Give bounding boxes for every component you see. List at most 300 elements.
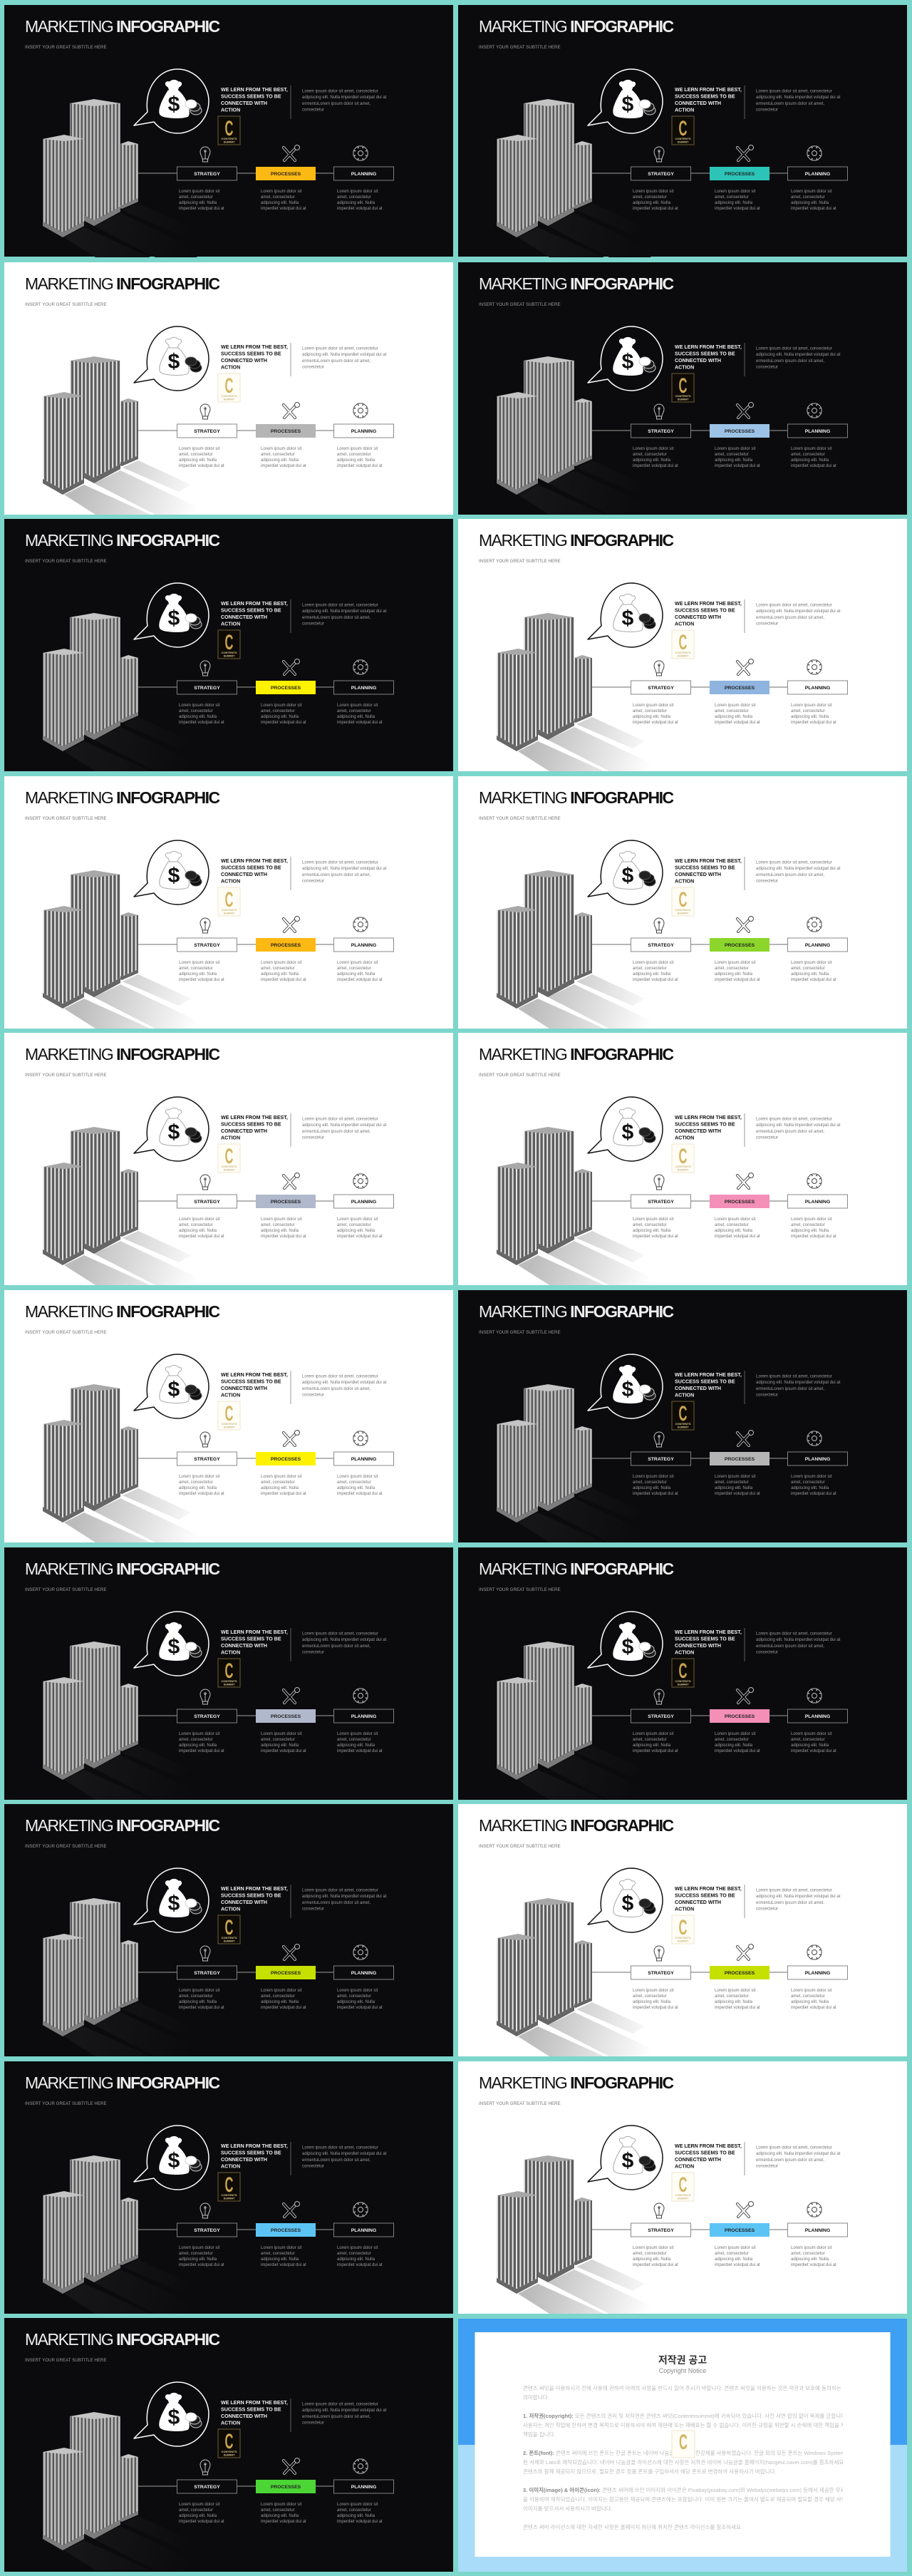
text: planning: amet, consectetur <box>791 1223 825 1227</box>
description: ermentuLorem ipsum dolor sit amet, <box>302 873 370 877</box>
copyright logo <box>672 2431 695 2458</box>
heading: ACTION <box>221 1393 240 1398</box>
text: planning: Lorem ipsum dolor sit <box>791 1475 832 1479</box>
logo: C <box>225 888 233 912</box>
text: processes: imperdiet volutpat dui at <box>715 721 760 725</box>
heading: CONNECTED WITH <box>675 872 721 877</box>
box: processes <box>256 1966 316 1979</box>
box: processes: PROCESSES <box>725 1457 755 1462</box>
logo: CONTENTS <box>221 1165 237 1168</box>
copyright card <box>475 2332 891 2557</box>
text: strategy: imperdiet volutpat dui at <box>179 1235 224 1239</box>
box: processes: PROCESSES <box>725 1714 755 1719</box>
text: planning: adipiscing elit. Nulla <box>337 1743 375 1748</box>
box: planning <box>788 1195 848 1208</box>
logo: C <box>679 888 687 912</box>
text: strategy: imperdiet volutpat dui at <box>633 2263 678 2267</box>
description: ermentuLorem ipsum dolor sit amet, <box>302 1387 370 1391</box>
logo: CONTENTS <box>675 137 691 140</box>
text: processes: adipiscing elit. Nulla <box>715 458 753 463</box>
text: processes: adipiscing elit. Nulla <box>261 201 299 205</box>
text: planning: amet, consectetur <box>791 2252 825 2256</box>
text: strategy: Lorem ipsum dolor sit <box>179 1732 220 1736</box>
buildings <box>43 870 200 1029</box>
heading: ACTION <box>221 1906 240 1912</box>
box: planning <box>333 2480 393 2493</box>
logo: CONTENTS <box>221 137 237 140</box>
text: strategy: Lorem ipsum dolor sit <box>179 1217 220 1222</box>
icon: gear <box>807 146 822 160</box>
text: strategy: amet, consectetur <box>633 1738 667 1742</box>
heading: ACTION <box>221 2164 240 2170</box>
text: processes: amet, consectetur <box>715 967 749 971</box>
heading: WE LERN FROM THE BEST, <box>675 601 742 607</box>
description: Lorem ipsum dolor sit amet, consectetur <box>756 1632 832 1637</box>
text: processes: imperdiet volutpat dui at <box>261 978 306 982</box>
description: Lorem ipsum dolor sit amet, consectetur <box>756 1118 832 1122</box>
icon: light bulb <box>200 147 210 162</box>
text: planning: Lorem ipsum dolor sit <box>791 1217 832 1222</box>
text: strategy: Lorem ipsum dolor sit <box>633 704 674 708</box>
logo: SUMMIT <box>678 1939 689 1943</box>
box: processes: PROCESSES <box>271 686 301 691</box>
icon: light bulb <box>654 661 664 676</box>
subtitle: INSERT YOUR GREAT SUBTITLE HERE <box>479 1844 561 1849</box>
text: strategy: Lorem ipsum dolor sit <box>179 2503 220 2507</box>
text: processes: Lorem ipsum dolor sit <box>261 961 302 965</box>
heading: SUCCESS SEEMS TO BE <box>221 351 281 356</box>
panel: copyright notice <box>458 2319 907 2572</box>
description: ermentuLorem ipsum dolor sit amet, <box>302 1130 370 1134</box>
text: planning: imperdiet volutpat dui at <box>337 2520 383 2524</box>
text: strategy: amet, consectetur <box>179 2252 213 2256</box>
speech bubble money icon <box>134 1097 209 1161</box>
icon: tools <box>737 1688 754 1703</box>
subtitle: INSERT YOUR GREAT SUBTITLE HERE <box>479 2101 561 2106</box>
heading: WE LERN FROM THE BEST, <box>675 1115 742 1120</box>
logo: SUMMIT <box>678 398 689 401</box>
heading: WE LERN FROM THE BEST, <box>675 1886 742 1892</box>
text: processes: imperdiet volutpat dui at <box>261 464 306 468</box>
description: Lorem ipsum dolor sit amet, consectetur <box>756 1889 832 1893</box>
connector line <box>138 430 333 431</box>
heading: CONNECTED WITH <box>675 1900 721 1905</box>
box: processes: PROCESSES <box>271 172 301 177</box>
box: planning <box>333 1966 393 1979</box>
logo: SUMMIT <box>678 911 689 915</box>
logo: C <box>225 117 233 140</box>
text: processes: adipiscing elit. Nulla <box>261 972 299 977</box>
logo: SUMMIT <box>224 1939 235 1943</box>
description: adipiscing elit. Nulla imperdiet volutpat dui at <box>302 1123 387 1128</box>
text: processes: adipiscing elit. Nulla <box>715 1486 753 1490</box>
text: processes: adipiscing elit. Nulla <box>715 2000 753 2004</box>
heading: SUCCESS SEEMS TO BE <box>221 607 281 613</box>
text: planning: amet, consectetur <box>791 967 825 971</box>
logo: SUMMIT <box>678 2197 689 2200</box>
panel: dark slide, orange processes <box>4 5 453 257</box>
text: strategy: amet, consectetur <box>179 1994 213 1999</box>
logo: C <box>225 2173 233 2197</box>
text: processes: amet, consectetur <box>715 1480 749 1485</box>
heading: CONNECTED WITH <box>675 1386 721 1391</box>
logo <box>218 2429 240 2458</box>
text: processes: amet, consectetur <box>261 967 295 971</box>
connector line <box>138 2485 333 2487</box>
subtitle: INSERT YOUR GREAT SUBTITLE HERE <box>479 1073 561 1078</box>
logo: SUMMIT <box>224 398 235 401</box>
description: consectetur <box>302 1651 324 1655</box>
heading: ACTION <box>221 1135 240 1140</box>
speech bubble money icon: $ <box>622 93 634 116</box>
box: planning <box>788 681 848 694</box>
text: planning: Lorem ipsum dolor sit <box>337 447 378 451</box>
icon: gear <box>807 917 822 932</box>
description: adipiscing elit. Nulla imperdiet volutpat dui at <box>302 867 387 871</box>
box: processes <box>256 424 316 438</box>
text: processes: amet, consectetur <box>715 195 749 200</box>
text: processes: adipiscing elit. Nulla <box>261 2257 299 2262</box>
box: planning: PLANNING <box>351 686 376 691</box>
box: processes: PROCESSES <box>725 1200 755 1205</box>
text: strategy: amet, consectetur <box>179 453 213 457</box>
heading: SUCCESS SEEMS TO BE <box>221 94 281 100</box>
copyright body text: 의미합니다. <box>523 2394 549 2401</box>
speech bubble money icon: $ <box>622 1635 634 1659</box>
description: ermentuLorem ipsum dolor sit amet, <box>756 616 824 620</box>
icon: light bulb <box>200 1175 210 1190</box>
text: strategy: amet, consectetur <box>179 1480 213 1485</box>
text: planning: Lorem ipsum dolor sit <box>791 1989 832 1993</box>
box: planning: PLANNING <box>351 1714 376 1719</box>
description: consectetur <box>756 1651 778 1655</box>
box: strategy <box>631 1966 691 1979</box>
box: processes: PROCESSES <box>725 2228 755 2233</box>
text: strategy: imperdiet volutpat dui at <box>179 1492 224 1496</box>
box: planning <box>333 1709 393 1723</box>
description: ermentuLorem ipsum dolor sit amet, <box>756 359 824 364</box>
text: strategy: adipiscing elit. Nulla <box>179 2000 217 2004</box>
description: Lorem ipsum dolor sit amet, consectetur <box>302 346 378 351</box>
speech bubble money icon: $ <box>168 1892 180 1915</box>
title: MARKETING INFOGRAPHIC <box>479 274 674 293</box>
text: processes: amet, consectetur <box>261 453 295 457</box>
connector line <box>138 172 333 174</box>
heading: SUCCESS SEEMS TO BE <box>221 1893 281 1899</box>
heading: SUCCESS SEEMS TO BE <box>675 351 735 356</box>
box: strategy: STRATEGY <box>194 1971 220 1976</box>
logo: C <box>679 2173 687 2197</box>
speech bubble money icon <box>134 583 209 647</box>
icon: tools <box>284 402 299 418</box>
text: processes: imperdiet volutpat dui at <box>715 464 760 468</box>
heading: CONNECTED WITH <box>675 101 721 106</box>
heading: ACTION <box>675 1393 694 1398</box>
box: strategy: STRATEGY <box>194 1200 220 1205</box>
text: strategy: adipiscing elit. Nulla <box>179 2514 217 2518</box>
speech bubble money icon <box>134 326 209 391</box>
text: strategy: imperdiet volutpat dui at <box>633 2006 678 2010</box>
speech bubble money icon <box>588 1097 663 1161</box>
icon: light bulb <box>200 918 210 933</box>
icon: tools <box>284 145 299 160</box>
heading: CONNECTED WITH <box>675 614 721 620</box>
heading: WE LERN FROM THE BEST, <box>675 2143 742 2149</box>
box: strategy <box>177 1709 237 1723</box>
text: processes: Lorem ipsum dolor sit <box>715 1989 756 1993</box>
panel: dark slide, green processes <box>4 2318 453 2572</box>
text: strategy: amet, consectetur <box>633 709 667 713</box>
icon: gear <box>353 2459 368 2473</box>
icon: tools <box>284 2458 299 2473</box>
box: processes <box>710 1195 770 1208</box>
description: Lorem ipsum dolor sit amet, consectetur <box>302 1118 378 1122</box>
text: processes: Lorem ipsum dolor sit <box>715 2246 756 2250</box>
text: strategy: imperdiet volutpat dui at <box>179 2520 224 2524</box>
box: planning: PLANNING <box>805 943 830 948</box>
heading: ACTION <box>675 878 694 884</box>
text: strategy: adipiscing elit. Nulla <box>633 201 671 205</box>
description: consectetur <box>756 1907 778 1912</box>
text: processes: Lorem ipsum dolor sit <box>261 704 302 708</box>
box: strategy: STRATEGY <box>648 172 674 177</box>
speech bubble money icon <box>588 1612 663 1676</box>
box: processes <box>256 167 316 180</box>
text: planning: imperdiet volutpat dui at <box>791 2006 836 2010</box>
text: planning: imperdiet volutpat dui at <box>791 1749 836 1753</box>
logo: C <box>679 374 687 398</box>
description: Lorem ipsum dolor sit amet, consectetur <box>302 603 378 607</box>
heading: SUCCESS SEEMS TO BE <box>675 2150 735 2155</box>
text: strategy: imperdiet volutpat dui at <box>179 464 224 468</box>
subtitle: INSERT YOUR GREAT SUBTITLE HERE <box>25 1073 107 1078</box>
text: planning: adipiscing elit. Nulla <box>337 2514 375 2518</box>
text: planning: amet, consectetur <box>337 2508 371 2513</box>
title: MARKETING INFOGRAPHIC <box>479 2073 674 2092</box>
speech bubble money icon: $ <box>168 864 180 887</box>
icon: light bulb <box>654 1175 664 1190</box>
title: MARKETING INFOGRAPHIC <box>25 788 220 807</box>
icon: gear <box>807 1431 822 1446</box>
title: MARKETING INFOGRAPHIC <box>25 1560 220 1578</box>
box: strategy: STRATEGY <box>194 429 220 434</box>
logo: C <box>225 631 233 654</box>
heading: WE LERN FROM THE BEST, <box>221 1372 288 1378</box>
text: planning: adipiscing elit. Nulla <box>337 1486 375 1490</box>
text: planning: Lorem ipsum dolor sit <box>337 1217 378 1222</box>
description: Lorem ipsum dolor sit amet, consectetur <box>302 2145 378 2150</box>
buildings <box>497 1384 654 1542</box>
box: processes <box>710 681 770 694</box>
title: MARKETING INFOGRAPHIC <box>479 1560 674 1578</box>
text: strategy: imperdiet volutpat dui at <box>179 978 224 982</box>
speech bubble money icon: $ <box>622 864 634 887</box>
speech bubble money icon <box>134 2126 209 2190</box>
text: strategy: Lorem ipsum dolor sit <box>179 961 220 965</box>
text: processes: Lorem ipsum dolor sit <box>261 190 302 194</box>
text: planning: Lorem ipsum dolor sit <box>337 961 378 965</box>
heading: CONNECTED WITH <box>221 872 267 877</box>
text: planning: imperdiet volutpat dui at <box>791 1492 836 1496</box>
connector line <box>138 944 333 945</box>
icon: light bulb <box>200 1432 210 1447</box>
text: strategy: imperdiet volutpat dui at <box>633 207 678 211</box>
heading: CONNECTED WITH <box>221 358 267 364</box>
speech bubble money icon: $ <box>622 2149 634 2173</box>
text: strategy: adipiscing elit. Nulla <box>179 1743 217 1748</box>
panel: dark slide, light blue processes <box>458 262 907 515</box>
text: strategy: Lorem ipsum dolor sit <box>179 190 220 194</box>
text: processes: amet, consectetur <box>261 195 295 200</box>
text: planning: amet, consectetur <box>791 1480 825 1485</box>
text: planning: imperdiet volutpat dui at <box>337 464 383 468</box>
panel: dark slide, teal processes <box>458 5 907 257</box>
text: strategy: Lorem ipsum dolor sit <box>633 2246 674 2250</box>
box: strategy: STRATEGY <box>194 1714 220 1719</box>
text: planning: imperdiet volutpat dui at <box>337 1492 383 1496</box>
subtitle: INSERT YOUR GREAT SUBTITLE HERE <box>479 1587 561 1592</box>
box: planning: PLANNING <box>351 943 376 948</box>
panel: dark slide, sky blue processes <box>4 2061 453 2314</box>
logo: C <box>225 1916 233 1939</box>
buildings <box>43 1898 200 2056</box>
text: processes: amet, consectetur <box>261 2252 295 2256</box>
icon: light bulb <box>654 404 664 419</box>
icon: tools <box>737 1430 754 1446</box>
heading: ACTION <box>221 107 240 113</box>
heading: CONNECTED WITH <box>675 1128 721 1134</box>
icon: tools <box>284 1688 299 1703</box>
text: processes: imperdiet volutpat dui at <box>715 978 760 982</box>
text: processes: imperdiet volutpat dui at <box>261 721 306 725</box>
box: processes <box>710 1709 770 1723</box>
text: strategy: adipiscing elit. Nulla <box>633 715 671 719</box>
buildings <box>497 1127 654 1285</box>
icon: gear <box>807 1689 822 1703</box>
heading: SUCCESS SEEMS TO BE <box>675 1637 735 1642</box>
logo: CONTENTS <box>675 908 691 912</box>
description: consectetur <box>302 622 324 627</box>
logo: SUMMIT <box>678 1426 689 1428</box>
heading: WE LERN FROM THE BEST, <box>221 344 288 350</box>
text: strategy: amet, consectetur <box>633 1994 667 1999</box>
icon: light bulb <box>200 661 210 676</box>
logo: CONTENTS <box>675 651 691 654</box>
connector line <box>592 1715 787 1716</box>
speech bubble money icon <box>134 1354 209 1418</box>
text: processes: imperdiet volutpat dui at <box>261 2263 306 2267</box>
text: strategy: Lorem ipsum dolor sit <box>179 1475 220 1479</box>
text: planning: amet, consectetur <box>337 2252 371 2256</box>
box: strategy <box>177 1195 237 1208</box>
logo: C <box>679 1145 687 1168</box>
text: planning: Lorem ipsum dolor sit <box>337 2503 378 2507</box>
text: planning: imperdiet volutpat dui at <box>791 1235 836 1239</box>
box: processes <box>256 681 316 694</box>
box: planning: PLANNING <box>805 429 830 434</box>
icon: tools <box>737 1944 754 1959</box>
description: Lorem ipsum dolor sit amet, consectetur <box>302 861 378 865</box>
title: MARKETING INFOGRAPHIC <box>479 17 674 36</box>
panel: light slide, sky blue processes <box>458 2061 907 2314</box>
box: processes: PROCESSES <box>725 172 755 177</box>
title: MARKETING INFOGRAPHIC <box>25 274 220 293</box>
box: planning: PLANNING <box>351 1971 376 1976</box>
box: strategy: STRATEGY <box>648 1714 674 1719</box>
description: consectetur <box>302 1393 324 1398</box>
subtitle: INSERT YOUR GREAT SUBTITLE HERE <box>479 302 561 307</box>
heading: WE LERN FROM THE BEST, <box>221 601 288 607</box>
logo <box>218 116 240 145</box>
box: processes <box>256 1452 316 1465</box>
icon: light bulb <box>654 1689 664 1704</box>
text: planning: amet, consectetur <box>337 1480 371 1485</box>
text: processes: Lorem ipsum dolor sit <box>261 1475 302 1479</box>
logo: CONTENTS <box>675 2193 691 2197</box>
text: planning: adipiscing elit. Nulla <box>337 2257 375 2262</box>
subtitle: INSERT YOUR GREAT SUBTITLE HERE <box>479 45 561 50</box>
icon: tools <box>737 917 754 932</box>
speech bubble money icon <box>134 69 209 133</box>
connector line <box>138 1715 333 1716</box>
icon: gear <box>807 403 822 418</box>
icon: light bulb <box>200 2203 210 2218</box>
speech bubble money icon <box>134 1612 209 1676</box>
text: processes: imperdiet volutpat dui at <box>715 2263 760 2267</box>
panel: dark slide, gray processes <box>458 1290 907 1542</box>
subtitle: INSERT YOUR GREAT SUBTITLE HERE <box>479 1330 561 1335</box>
box: processes <box>710 1966 770 1979</box>
text: strategy: Lorem ipsum dolor sit <box>179 1989 220 1993</box>
box: processes <box>256 1195 316 1208</box>
heading: ACTION <box>221 2421 240 2426</box>
icon: light bulb <box>200 404 210 419</box>
text: planning: adipiscing elit. Nulla <box>791 715 829 719</box>
text: strategy: Lorem ipsum dolor sit <box>633 190 674 194</box>
panel: light slide, blue processes <box>458 519 907 771</box>
description: ermentuLorem ipsum dolor sit amet, <box>756 1901 824 1905</box>
text: planning: Lorem ipsum dolor sit <box>791 2246 832 2250</box>
icon: tools <box>737 659 754 674</box>
text: planning: Lorem ipsum dolor sit <box>337 190 378 194</box>
description: Lorem ipsum dolor sit amet, consectetur <box>302 2402 378 2406</box>
logo: C <box>225 374 233 398</box>
box: strategy <box>177 938 237 952</box>
speech bubble money icon: $ <box>168 607 180 630</box>
title: MARKETING INFOGRAPHIC <box>25 1816 220 1835</box>
icon: tools <box>737 402 754 418</box>
box: processes <box>710 424 770 438</box>
text: planning: Lorem ipsum dolor sit <box>791 447 832 451</box>
heading: SUCCESS SEEMS TO BE <box>675 1122 735 1128</box>
description: Lorem ipsum dolor sit amet, consectetur <box>756 2145 832 2150</box>
speech bubble money icon: $ <box>168 2406 180 2429</box>
box: processes: PROCESSES <box>271 1457 301 1462</box>
description: adipiscing elit. Nulla imperdiet volutpat dui at <box>302 1638 387 1642</box>
title: MARKETING INFOGRAPHIC <box>479 1045 674 1063</box>
heading: ACTION <box>221 1649 240 1655</box>
text: strategy: adipiscing elit. Nulla <box>633 2257 671 2262</box>
speech bubble money icon <box>588 326 663 391</box>
description: adipiscing elit. Nulla imperdiet volutpat dui at <box>756 1895 841 1899</box>
heading: SUCCESS SEEMS TO BE <box>675 94 735 100</box>
box: processes: PROCESSES <box>725 686 755 691</box>
heading: WE LERN FROM THE BEST, <box>221 1115 288 1120</box>
heading: SUCCESS SEEMS TO BE <box>221 2406 281 2412</box>
text: processes: Lorem ipsum dolor sit <box>261 1217 302 1222</box>
text: planning: amet, consectetur <box>337 195 371 200</box>
heading: CONNECTED WITH <box>221 101 267 106</box>
